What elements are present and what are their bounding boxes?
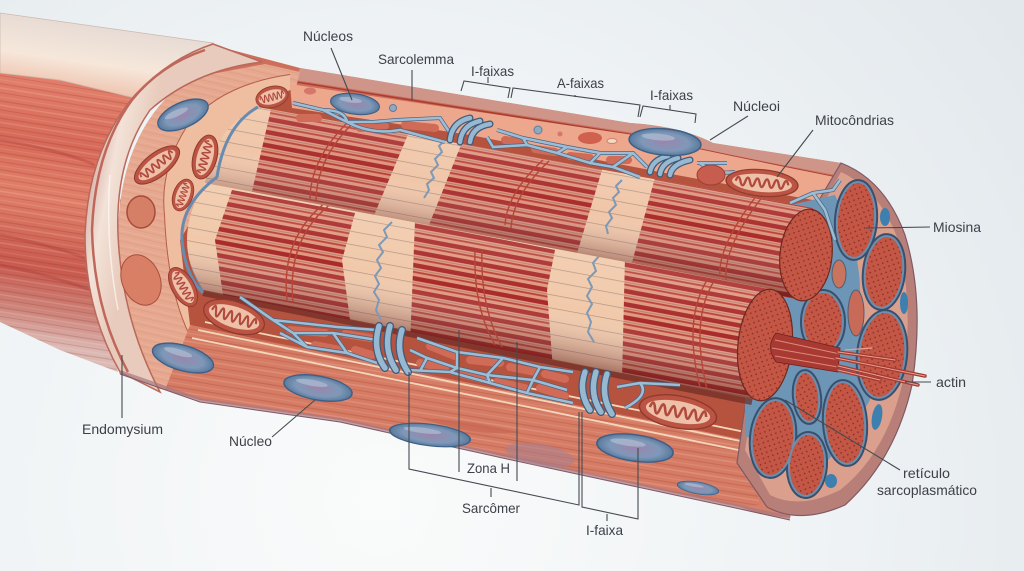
blue reticulum background bbox=[745, 195, 870, 480]
shadow below the fibrils bbox=[203, 293, 752, 402]
upper strip peach bbox=[290, 84, 840, 205]
A-band dark stripes, lower bbox=[215, 190, 790, 410]
A-band dark stripes, upper bbox=[250, 105, 820, 310]
labels: sarcoplasmático bbox=[877, 482, 977, 498]
leader lines bbox=[122, 48, 931, 521]
blue boundary of interior bbox=[182, 107, 258, 293]
T-tubule coils bbox=[377, 118, 690, 414]
nuclei bbox=[149, 90, 720, 498]
labels: Mitocôndrias bbox=[815, 112, 894, 128]
main fibre body bbox=[120, 45, 850, 518]
labels: I-faixa bbox=[586, 522, 623, 538]
labels: I-faixas bbox=[650, 87, 693, 103]
labels: actin bbox=[936, 374, 966, 390]
myofibril cross-sections bbox=[748, 181, 909, 497]
labels: Endomysium bbox=[82, 421, 163, 437]
myofibril: lower cylinder bbox=[187, 183, 794, 402]
myofibril: upper cylinder bbox=[205, 107, 833, 302]
labels: retículo bbox=[903, 465, 950, 481]
lower sarcolemma strip bbox=[120, 322, 790, 520]
labels: A-faixas bbox=[557, 75, 604, 91]
labels: Sarcômer bbox=[462, 500, 520, 516]
labels: Sarcolemma bbox=[378, 51, 454, 67]
reticulum cell fill bbox=[290, 118, 628, 396]
left outer muscle bbox=[0, 13, 213, 372]
reticulum halos around cross-sections bbox=[748, 181, 909, 497]
interior gap behind the fibrils bbox=[180, 90, 860, 445]
collar: endomysium band bbox=[85, 44, 262, 392]
upper cylinder end bbox=[775, 207, 837, 303]
sarcoplasmic reticulum network, top bbox=[293, 103, 840, 240]
labels: Zona H bbox=[467, 460, 510, 476]
end face: cross-section of the fibre bbox=[737, 163, 917, 516]
mitochondria bbox=[114, 83, 799, 435]
labels bbox=[82, 28, 981, 538]
interior peach rim bbox=[118, 64, 300, 392]
sarcoplasmic reticulum network, bottom bbox=[240, 297, 680, 408]
lower cylinder end bbox=[732, 286, 798, 404]
cream connective covering bbox=[0, 13, 213, 98]
labels: Núcleo bbox=[229, 433, 272, 449]
labels: I-faixas bbox=[471, 63, 514, 79]
labels: Miosina bbox=[933, 219, 981, 235]
actin filament bundle bbox=[770, 333, 925, 385]
labels: Núcleoi bbox=[733, 98, 780, 114]
labels: Núcleos bbox=[303, 28, 353, 44]
